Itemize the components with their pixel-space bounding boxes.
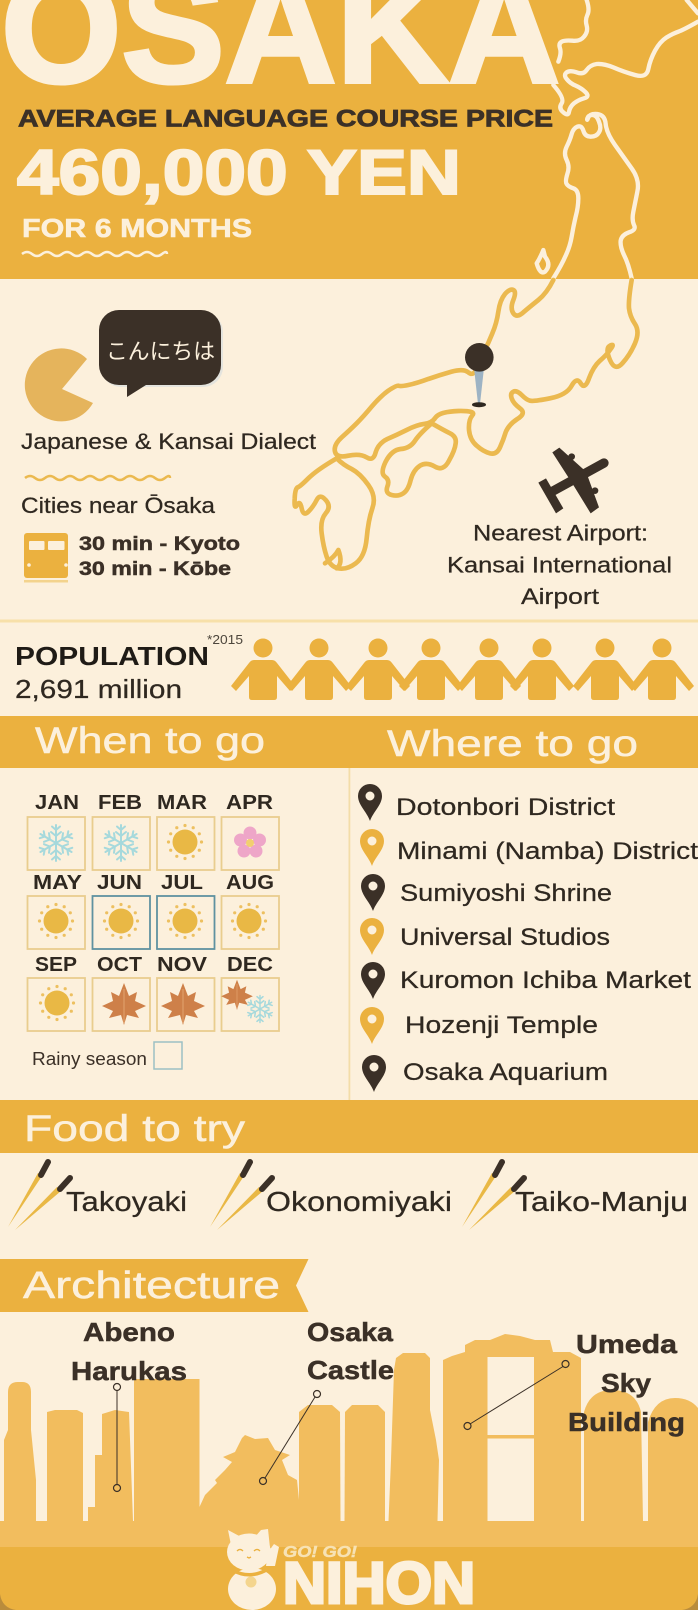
logo: go go: GO! GO! bbox=[283, 1544, 358, 1561]
text: language: Japanese & Kansai Dialect bbox=[21, 429, 316, 454]
item: Dotonbori: Dotonbori District bbox=[396, 794, 615, 821]
label: Umeda Sky Building: Building bbox=[568, 1407, 685, 1437]
map: northern Japan outline bbox=[537, 0, 698, 278]
text: Kyoto travel time: 30 min - Kyoto bbox=[79, 533, 240, 555]
month labels bbox=[33, 792, 274, 976]
skyline bbox=[0, 1334, 698, 1551]
icon: train bbox=[24, 533, 68, 582]
squiggle bbox=[25, 476, 170, 480]
text: Takoyaki: Takoyaki bbox=[66, 1186, 187, 1217]
item: Hozenji: Hozenji Temple bbox=[405, 1012, 598, 1039]
panel: population bbox=[15, 633, 694, 704]
label: Abeno Harukas bbox=[71, 1317, 187, 1492]
month labels: MAY bbox=[33, 872, 83, 894]
icon: speech bubble: こんにちは bbox=[106, 339, 215, 364]
panel: header bbox=[0, 0, 698, 279]
banner: when and where bbox=[0, 716, 698, 768]
heading: average price: AVERAGE LANGUAGE COURSE PRICE bbox=[18, 106, 553, 132]
month labels: DEC bbox=[227, 954, 273, 976]
legend: rainy season: Rainy season bbox=[32, 1049, 147, 1069]
icons: seasons bbox=[38, 824, 274, 1025]
panel: food list bbox=[8, 1162, 688, 1230]
text: Taiko-Manju: Taiko-Manju bbox=[515, 1186, 688, 1217]
month labels: JUN bbox=[97, 872, 142, 894]
month labels: FEB bbox=[98, 792, 142, 814]
label: Umeda Sky Building: Umeda bbox=[576, 1329, 678, 1359]
footer bbox=[0, 1529, 698, 1610]
item: Universal: Universal Studios bbox=[400, 924, 610, 951]
icon: chopsticks 1 bbox=[8, 1162, 70, 1230]
text: cities: Cities near Ōsaka bbox=[21, 493, 216, 518]
icon row: people bbox=[231, 638, 694, 700]
label: Osaka Castle: Castle bbox=[307, 1355, 394, 1385]
panel: where to go list bbox=[358, 784, 698, 1092]
text: duration: FOR 6 MONTHS bbox=[22, 213, 252, 243]
text: airport name line 2: Airport bbox=[521, 584, 599, 609]
item: Aquarium: Osaka Aquarium bbox=[403, 1059, 608, 1086]
month labels: MAR bbox=[157, 792, 208, 814]
banner: architecture bbox=[0, 1259, 308, 1312]
heading: when to go: When to go bbox=[35, 720, 265, 761]
icon: airplane bbox=[538, 448, 604, 513]
logo: cat bbox=[227, 1529, 279, 1610]
icon: map pin Osaka bbox=[465, 343, 494, 407]
item: Hozenji bbox=[360, 1007, 598, 1044]
panel: calendar bbox=[28, 792, 279, 1069]
item: Minami: Minami (Namba) District bbox=[397, 838, 698, 865]
text: Okonomiyaki: Okonomiyaki bbox=[266, 1186, 452, 1217]
label: Osaka Castle bbox=[260, 1317, 394, 1484]
icon: pie bbox=[25, 348, 93, 421]
icon: chopsticks 2 bbox=[210, 1162, 272, 1230]
month labels: AUG bbox=[226, 872, 274, 894]
banner: food: Food to try bbox=[24, 1108, 246, 1149]
item: Kuromon: Kuromon Ichiba Market bbox=[400, 967, 691, 994]
heading: population: POPULATION bbox=[15, 641, 209, 671]
banner: architecture: Architecture bbox=[23, 1265, 280, 1307]
item: Aquarium bbox=[362, 1055, 608, 1092]
icon: chopsticks 3 bbox=[462, 1162, 524, 1230]
month labels: OCT bbox=[97, 954, 142, 976]
month labels: APR bbox=[226, 792, 274, 814]
item: Sumiyoshi: Sumiyoshi Shrine bbox=[400, 880, 612, 907]
footnote: year: *2015 bbox=[207, 633, 243, 647]
banner: food bbox=[0, 1100, 698, 1153]
icon: speech bubble bbox=[99, 310, 223, 397]
text: Kobe travel time: 30 min - Kōbe bbox=[79, 558, 231, 580]
label: Umeda Sky Building bbox=[464, 1329, 685, 1437]
label: Abeno Harukas: Harukas bbox=[71, 1356, 187, 1386]
item: Sumiyoshi bbox=[361, 874, 612, 911]
number: population: 2,691 million bbox=[15, 674, 182, 704]
squiggle bbox=[22, 252, 167, 256]
item: Kuromon bbox=[361, 962, 691, 999]
heading: where to go: Where to go bbox=[387, 723, 638, 764]
label: Osaka Castle: Osaka bbox=[307, 1317, 394, 1347]
month labels: NOV bbox=[157, 954, 208, 976]
panel: language bbox=[21, 310, 316, 582]
label: Umeda Sky Building: Sky bbox=[601, 1368, 652, 1398]
item: Minami bbox=[360, 829, 698, 866]
text: nearest airport: Nearest Airport: bbox=[473, 520, 648, 546]
month labels: JUL bbox=[161, 872, 203, 894]
month labels: JAN bbox=[35, 792, 79, 814]
legend: rainy season bbox=[32, 1042, 182, 1069]
big number: price: 460,000 YEN bbox=[17, 138, 461, 208]
text: airport name line 1: Kansai International bbox=[447, 552, 672, 578]
month boxes bbox=[28, 817, 279, 1031]
label: Abeno Harukas: Abeno bbox=[83, 1317, 175, 1347]
item: Universal bbox=[360, 918, 610, 955]
panel: airport bbox=[447, 448, 672, 609]
corner shading bbox=[0, 1594, 698, 1610]
month labels: SEP bbox=[35, 954, 77, 976]
map: southern Japan outline bbox=[295, 280, 637, 569]
item: Dotonbori bbox=[358, 784, 615, 821]
